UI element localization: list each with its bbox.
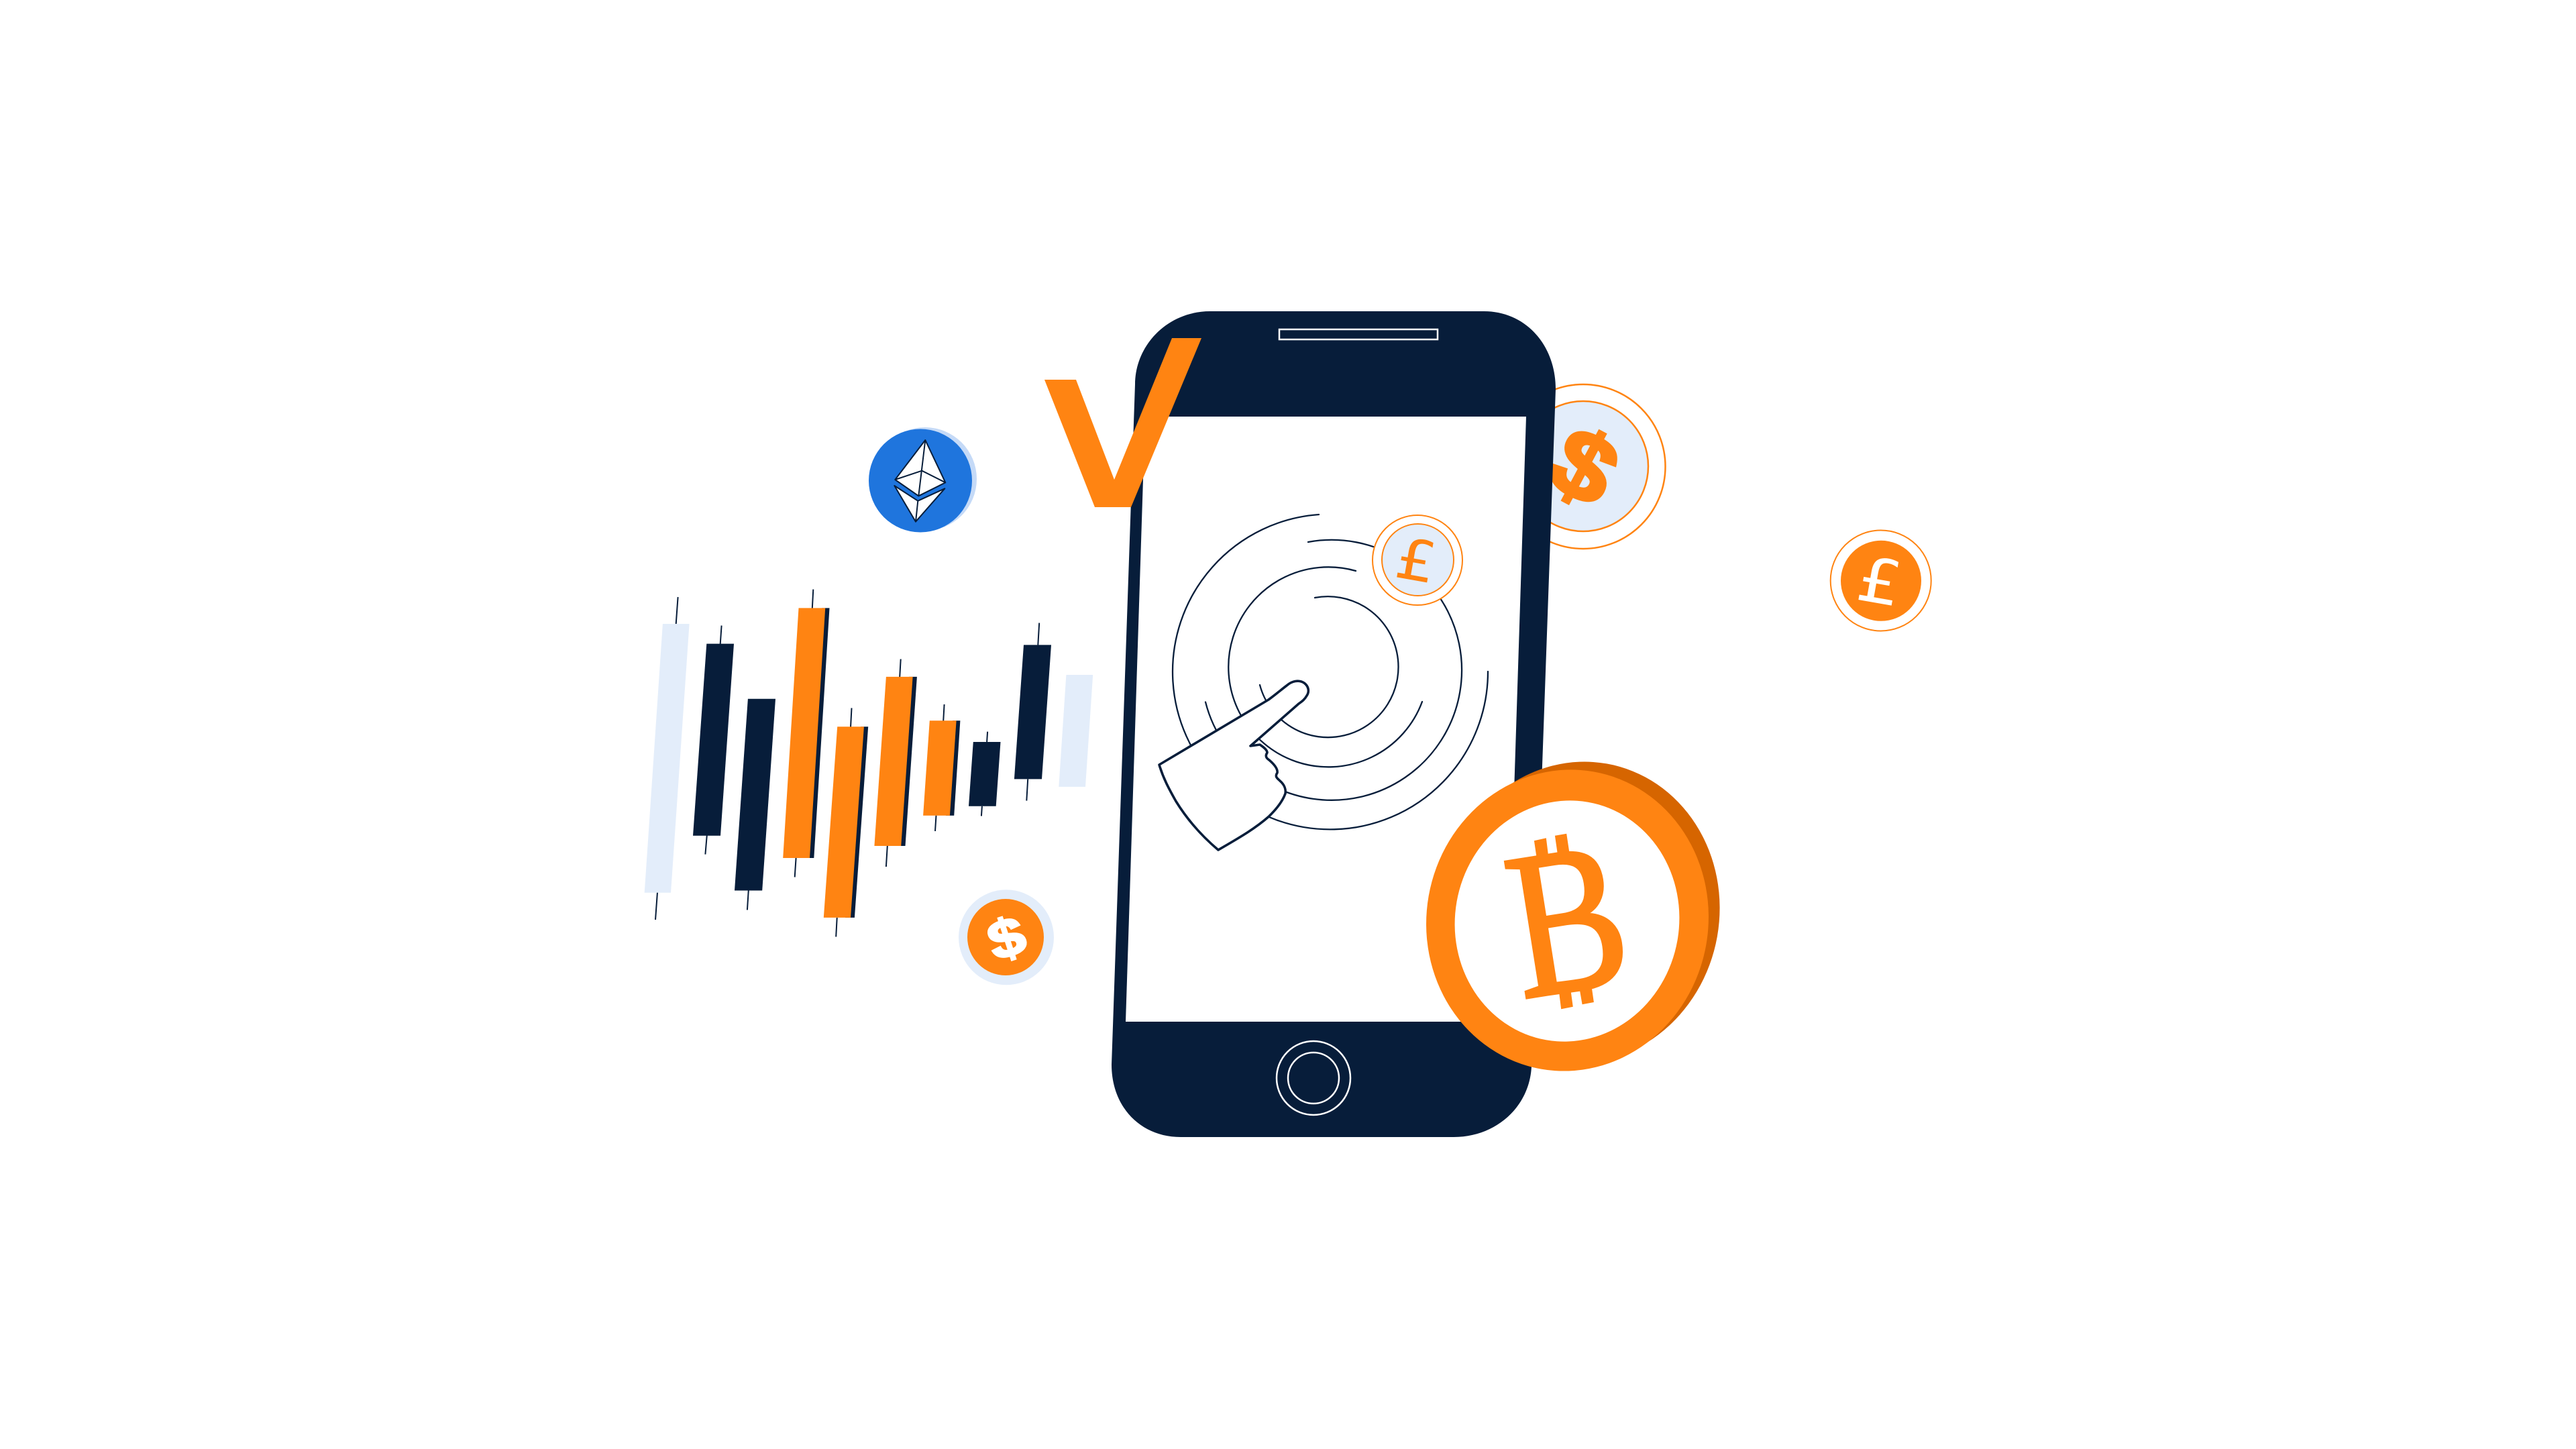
- icon: pound coin on screen: [1373, 515, 1462, 605]
- logo: orange V: [1044, 338, 1201, 507]
- phone speaker: [1279, 329, 1438, 339]
- phone screen: [1126, 417, 1526, 1022]
- icon: pound coin on screen: £: [1391, 525, 1442, 597]
- candlestick chart: [645, 590, 1093, 936]
- phone body: [1112, 311, 1556, 1137]
- coin edge: [1417, 739, 1743, 1085]
- bitcoin symbol: B: [1493, 796, 1642, 1043]
- coin face: [1403, 747, 1732, 1093]
- icon: small dollar coin: $: [980, 904, 1033, 972]
- touch ripple rings: [1173, 515, 1488, 829]
- phone: [1112, 311, 1556, 1137]
- icon: pointing hand: [1159, 681, 1308, 850]
- icon: pound coin right: £: [1851, 543, 1907, 621]
- home button: [1277, 1041, 1350, 1115]
- icon: large dollar coin behind phone: $: [1533, 405, 1635, 527]
- icon: ethereum coin: [869, 427, 977, 533]
- coin centre: [1436, 783, 1699, 1059]
- icon: large dollar coin behind phone: [1501, 384, 1665, 549]
- icon: bitcoin coin: [1403, 739, 1743, 1093]
- icon: pound coin right: [1831, 530, 1931, 631]
- icon: small dollar coin: [959, 890, 1054, 985]
